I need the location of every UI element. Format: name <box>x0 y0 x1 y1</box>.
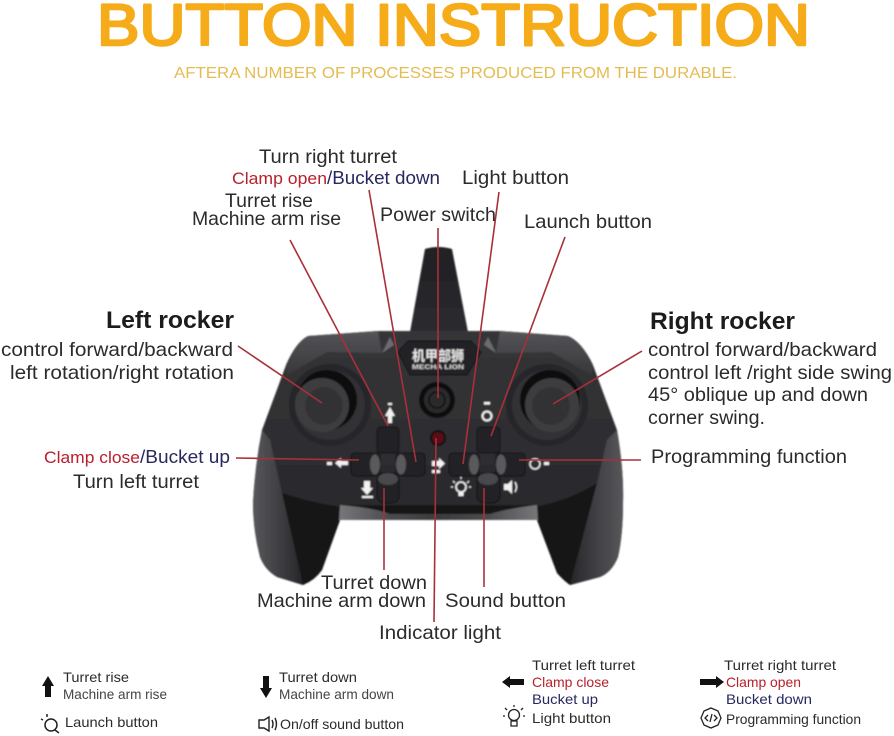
legend: turret right: Clamp open <box>726 674 801 690</box>
controller antenna <box>410 247 468 332</box>
nameplate text: 机甲部狮 <box>412 346 464 366</box>
legend: turret rise: Turret rise <box>63 669 129 685</box>
legend: turret left <box>502 657 635 707</box>
legend: light button <box>503 705 611 726</box>
icon: right arrow <box>700 676 724 688</box>
printed button icons <box>327 402 549 498</box>
subtitle: AFTERA NUMBER OF PROCESSES PRODUCED FROM THE DURABLE. <box>174 65 737 82</box>
left rocker heading and text <box>1 307 234 384</box>
legend: turret right <box>700 657 836 707</box>
left rocker heading and text: left rotation/right rotation <box>10 362 234 384</box>
label: clamp close / bucket up: Clamp close <box>44 448 140 467</box>
legend: turret rise <box>42 669 167 702</box>
label: turn right turret: Clamp open <box>232 169 327 188</box>
right rocker heading and text: 45° oblique up and down <box>648 384 868 406</box>
label: clamp close / bucket up: Turn left turret <box>73 471 200 493</box>
leader lines <box>236 190 642 622</box>
indicator light <box>430 430 446 446</box>
label: indicator light: Indicator light <box>379 622 502 644</box>
right grip shading <box>570 430 623 585</box>
icon: down arrow <box>260 676 272 698</box>
legend: programming function <box>701 708 861 728</box>
right shoulder highlight <box>496 331 593 375</box>
nameplate <box>398 341 481 375</box>
legend: turret rise: Machine arm rise <box>63 686 167 702</box>
label: light button: Light button <box>462 167 569 189</box>
icon: light bulb <box>503 705 525 726</box>
left rocker <box>289 364 371 446</box>
left shoulder highlight <box>286 331 382 375</box>
legend: turret down: Turret down <box>279 669 357 685</box>
right rocker heading and text: control left /right side swing <box>648 362 892 384</box>
icon: launch <box>41 714 59 733</box>
legend: launch button: Launch button <box>65 714 158 730</box>
legend: turret down: Machine arm down <box>279 686 394 702</box>
label: launch button: Launch button <box>524 211 652 233</box>
legend: turret left: Turret left turret <box>532 657 635 673</box>
right d-pad <box>449 427 525 503</box>
icon: up arrow <box>42 676 54 697</box>
left rocker heading and text: control forward/backward <box>1 339 233 361</box>
right rocker heading and text: control forward/backward <box>648 339 877 361</box>
right rocker <box>506 364 588 446</box>
icon: left arrow <box>502 676 524 688</box>
legend: sound button: On/off sound button <box>280 716 404 732</box>
legend: turret left: Bucket up <box>532 691 598 707</box>
legend: light button: Light button <box>532 710 611 726</box>
controller body <box>253 331 623 585</box>
label: turn right turret: Turn right turret <box>259 146 398 168</box>
centre facets <box>382 337 496 353</box>
legend: turret left: Clamp close <box>532 674 609 690</box>
label: clamp close / bucket up: /Bucket up <box>140 447 230 467</box>
centre dark strip <box>340 505 537 516</box>
label: clamp close / bucket up <box>44 447 230 493</box>
right rocker heading and text: Right rocker <box>650 308 795 335</box>
right rocker heading and text <box>648 308 892 429</box>
label: sound button: Sound button <box>445 590 566 612</box>
legend: turret down <box>260 669 394 702</box>
label: turret down <box>257 572 427 612</box>
power switch <box>419 382 455 418</box>
right rocker heading and text: corner swing. <box>648 407 765 429</box>
icon: speaker <box>259 717 276 731</box>
icon: programming gear <box>701 708 721 728</box>
label: turret down: Machine arm down <box>257 590 426 612</box>
label: turn right turret: /Bucket down <box>327 168 440 188</box>
legend: turret right: Turret right turret <box>724 657 836 673</box>
label: turn right turret <box>232 146 440 188</box>
lower dark panels <box>282 483 606 585</box>
left rocker heading and text: Left rocker <box>106 307 234 334</box>
legend: turret right: Bucket down <box>726 691 812 707</box>
label: programming function: Programming function <box>651 446 847 468</box>
label: power switch: Power switch <box>380 204 496 226</box>
legend: programming function: Programming function <box>726 711 861 727</box>
left grip shading <box>253 430 303 585</box>
left d-pad <box>351 427 425 503</box>
nameplate: MECHA LION <box>412 365 464 371</box>
legend: launch button <box>41 714 158 733</box>
controller <box>253 247 623 585</box>
label: turret rise: Machine arm rise <box>192 208 341 230</box>
label: turret rise: Turret rise <box>225 190 313 212</box>
bottom silver edge <box>339 505 538 520</box>
label: turret rise <box>192 190 341 230</box>
label: turret down: Turret down <box>321 572 427 594</box>
